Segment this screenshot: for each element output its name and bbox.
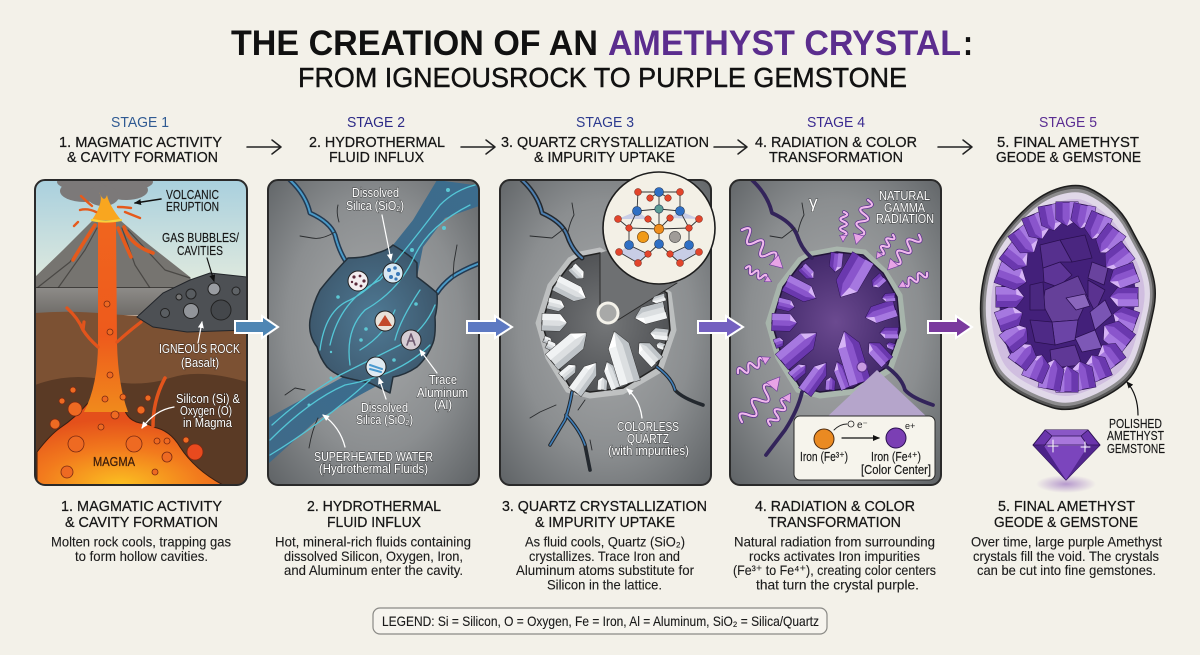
label: superheated water: SUPERHEATED WATER — [314, 449, 433, 464]
inset: iron color center: [Color Center] — [861, 462, 931, 477]
description 5 — [971, 498, 1162, 578]
label: dissolved silica bottom: Dissolved — [361, 400, 408, 415]
halo around cavity — [537, 249, 675, 397]
label: colorless quartz: COLORLESS — [617, 419, 679, 434]
description 1 — [51, 498, 231, 564]
flow arrow: panel 2 to 3 — [467, 316, 512, 338]
label: natural gamma radiation: NATURAL — [879, 188, 930, 203]
labels: gas bubbles: GAS BUBBLES/ — [162, 230, 239, 245]
cracks — [770, 203, 804, 238]
panel: amethyst geode — [981, 186, 1165, 493]
labels: volcanic eruption: ERUPTION — [166, 199, 219, 214]
inset: iron color center: e⁻ — [857, 420, 868, 431]
description 5: 5. FINAL AMETHYST — [998, 498, 1135, 515]
label: gamma symbol: γ — [809, 193, 818, 212]
labels: silicon and oxygen: in Magma — [183, 415, 233, 430]
description 5: can be cut into fine gemstones. — [977, 562, 1156, 578]
stage header 1: STAGE 1 — [111, 114, 169, 131]
labels: gas bubbles — [162, 230, 239, 281]
label: dissolved silica bottom: Silica (SiO₂) — [356, 412, 413, 427]
label: natural gamma radiation — [876, 188, 934, 226]
labels: silicon and oxygen — [142, 391, 240, 430]
panel: magmatic activity — [35, 171, 247, 485]
description 5: GEODE & GEMSTONE — [994, 514, 1138, 531]
description 3: 3. QUARTZ CRYSTALLIZATION — [502, 498, 707, 515]
geode dark center — [1000, 210, 1136, 385]
lava on flanks — [73, 225, 153, 260]
label: superheated water — [314, 415, 433, 476]
stage header 4: 4. RADIATION & COLOR — [755, 134, 917, 151]
mineral particles — [348, 263, 421, 377]
label: colorless quartz — [608, 389, 689, 458]
cavity — [542, 253, 670, 392]
title — [231, 24, 973, 93]
inner crystal facets — [1030, 235, 1112, 368]
description 3: crystallizes. Trace Iron and — [529, 548, 680, 564]
description 3: & IMPURITY UPTAKE — [535, 514, 675, 531]
labels: volcanic eruption — [135, 187, 219, 214]
gamma wavy arrows — [736, 199, 929, 427]
labels: igneous rock: (Basalt) — [181, 355, 219, 370]
label: natural gamma radiation: RADIATION — [876, 211, 934, 226]
inset: iron color center: Iron (Fe³⁺) — [800, 449, 848, 464]
title: : — [963, 24, 973, 63]
arrow: stage 3 to 4 — [714, 140, 747, 154]
fluid rivers — [268, 180, 482, 464]
description 2: dissolved Silicon, Oxygen, Iron, — [284, 548, 463, 564]
title: AMETHYST CRYSTAL — [608, 24, 961, 63]
geode outer rock rim — [981, 186, 1155, 409]
stage header 3: & IMPURITY UPTAKE — [534, 149, 675, 166]
flow arrow: panel 3 to 4 — [698, 316, 743, 338]
labels: silicon and oxygen: Silicon (Si) & — [176, 391, 240, 406]
legend: LEGEND: Si = Silicon, O = Oxygen, Fe = Iron, Al = Aluminum, SiO₂ = Silica/Quartz — [382, 613, 819, 629]
description 3: Silicon in the lattice. — [547, 576, 662, 592]
veins — [752, 180, 933, 455]
description 4: TRANSFORMATION — [768, 514, 901, 531]
panel: hydrothermal fluid influx — [268, 180, 482, 485]
label: colorless quartz: QUARTZ — [627, 431, 669, 446]
igneous rock with cavities — [137, 273, 247, 332]
description 4: (Fe³⁺ to Fe⁴⁺), creating color centers — [733, 562, 936, 578]
stage header 3: 3. QUARTZ CRYSTALLIZATION — [501, 134, 709, 151]
label: superheated water: (Hydrothermal Fluids) — [319, 461, 428, 476]
inset: iron color center — [794, 416, 935, 480]
icon: volcano mountain — [35, 220, 195, 292]
description 4 — [733, 498, 936, 592]
label: natural gamma radiation: GAMMA — [884, 200, 925, 215]
labels: silicon and oxygen: Oxygen (O) — [180, 403, 232, 418]
description 1: to form hollow cavities. — [75, 548, 208, 564]
stage header 2: FLUID INFLUX — [329, 149, 424, 166]
inset: iron color center: Iron (Fe⁴⁺) — [871, 449, 921, 464]
stage header 1 — [59, 114, 222, 166]
title: THE CREATION OF AN — [231, 24, 598, 63]
labels: igneous rock — [159, 322, 240, 370]
label: colorless quartz: (with impurities) — [608, 443, 689, 458]
description 2 — [275, 498, 471, 578]
conduit — [84, 222, 128, 412]
stage header 4: TRANSFORMATION — [769, 149, 903, 166]
description 4: that turn the crystal purple. — [756, 576, 919, 592]
label: dissolved silica bottom — [356, 378, 413, 427]
stage header 2: STAGE 2 — [347, 114, 405, 131]
label: dissolved silica top: Dissolved — [352, 185, 399, 200]
radiation cone — [827, 370, 927, 417]
description 1: Molten rock cools, trapping gas — [51, 534, 231, 550]
arrow: stage 1 to 2 — [247, 140, 281, 154]
panel: radiation and color transformation — [730, 180, 941, 485]
icon: cut gemstone — [1033, 430, 1100, 493]
label: polished amethyst gemstone — [1107, 382, 1165, 456]
stage header 1: 1. MAGMATIC ACTIVITY — [59, 134, 222, 151]
title: FROM IGNEOUSROCK TO PURPLE GEMSTONE — [298, 62, 907, 93]
amethyst crystals — [772, 252, 898, 396]
label: trace aluminum: Aluminum — [417, 385, 468, 400]
inset: iron color center: e+ — [905, 421, 915, 431]
label: trace aluminum: Trace — [429, 372, 457, 387]
labels: volcanic eruption: VOLCANIC — [166, 187, 219, 202]
stage header 3 — [501, 114, 709, 166]
label: dissolved silica top: Silica (SiO₂) — [346, 198, 404, 213]
cracks — [285, 205, 457, 448]
stage header 4 — [755, 114, 917, 166]
flow arrow: panel 4 to 5 — [928, 316, 972, 338]
cavity glow — [767, 248, 905, 397]
label: dissolved silica top — [346, 185, 404, 260]
veins — [522, 180, 703, 470]
stage header 5: GEODE & GEMSTONE — [996, 149, 1141, 166]
inset: crystal lattice — [603, 172, 715, 284]
stage header 4: STAGE 4 — [807, 114, 865, 131]
stage header 1: & CAVITY FORMATION — [67, 149, 218, 166]
description 5: crystals fill the void. The crystals — [973, 548, 1159, 564]
description 5: Over time, large purple Amethyst — [971, 534, 1162, 550]
label: polished amethyst gemstone: AMETHYST — [1107, 428, 1164, 443]
description 2: 2. HYDROTHERMAL — [307, 498, 441, 515]
description 3: As fluid cools, Quartz (SiO₂) — [525, 534, 685, 550]
magma chamber — [37, 403, 223, 485]
stage header 5: STAGE 5 — [1039, 114, 1097, 131]
stage header 5 — [996, 114, 1141, 166]
description 2: and Aluminum enter the cavity. — [284, 562, 463, 578]
description 3: Aluminum atoms substitute for — [516, 562, 694, 578]
stage header 2: 2. HYDROTHERMAL — [309, 134, 445, 151]
label: trace aluminum: (Al) — [434, 397, 452, 412]
crystal ring — [994, 202, 1139, 392]
description 1: & CAVITY FORMATION — [65, 514, 218, 531]
cavity — [310, 245, 437, 393]
description 2: FLUID INFLUX — [327, 514, 421, 531]
label: polished amethyst gemstone: GEMSTONE — [1107, 441, 1165, 456]
arrow: stage 4 to 5 — [938, 140, 972, 154]
quartz crystals — [542, 263, 669, 396]
cyan flow lines — [270, 185, 475, 455]
magnifier ring — [598, 303, 618, 323]
bubbles — [50, 301, 203, 478]
callout cone — [600, 250, 678, 320]
legend — [373, 608, 827, 634]
geode banding — [983, 189, 1153, 406]
cavity — [772, 252, 900, 392]
stage header 5: 5. FINAL AMETHYST — [997, 134, 1139, 151]
description 4: rocks activates Iron impurities — [749, 548, 920, 564]
flow arrow: panel 1 to 2 — [235, 316, 278, 338]
panel: quartz crystallization — [500, 172, 715, 485]
description 4: 4. RADIATION & COLOR — [755, 498, 915, 515]
description 3 — [502, 498, 707, 592]
stage header 2 — [309, 114, 445, 166]
labels: gas bubbles: CAVITIES — [177, 243, 223, 258]
description 4: Natural radiation from surrounding — [734, 534, 935, 550]
description 1: 1. MAGMATIC ACTIVITY — [61, 498, 222, 515]
label: magma: MAGMA — [93, 454, 135, 469]
smoke cloud — [57, 181, 153, 206]
arrow: stage 2 to 3 — [461, 140, 495, 154]
label: trace aluminum — [417, 350, 468, 412]
stage header 3: STAGE 3 — [576, 114, 634, 131]
description 2: Hot, mineral-rich fluids containing — [275, 534, 471, 550]
labels: igneous rock: IGNEOUS ROCK — [159, 341, 240, 356]
label: polished amethyst gemstone: POLISHED — [1109, 416, 1162, 431]
